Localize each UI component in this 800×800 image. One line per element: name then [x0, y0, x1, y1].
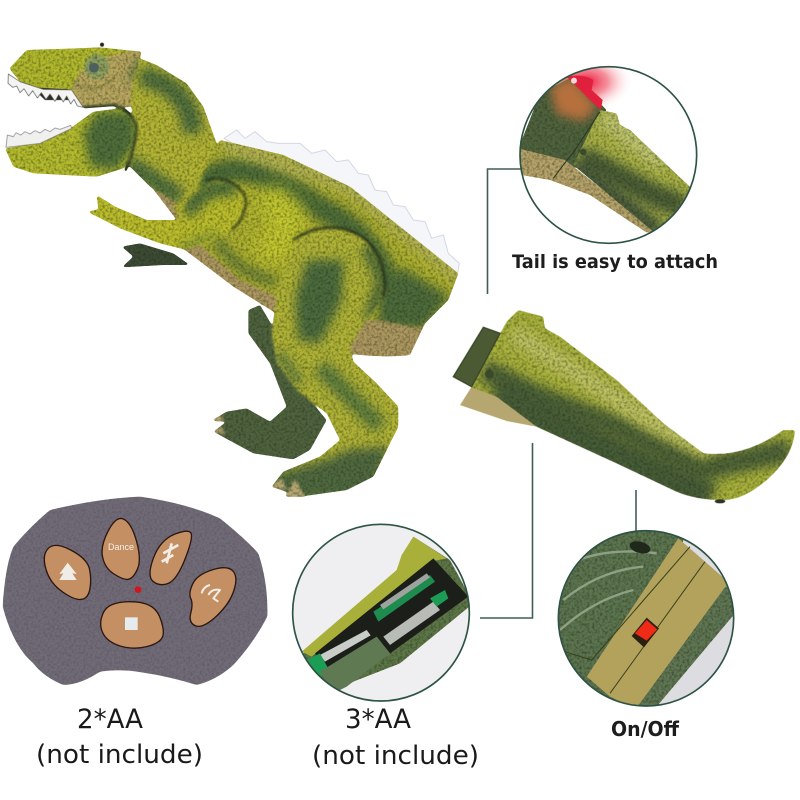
batteries — [373, 575, 435, 622]
label: toy not included: (not include) — [312, 741, 479, 771]
lower teeth — [6, 125, 72, 147]
tail screw — [485, 370, 494, 378]
seams — [565, 547, 705, 693]
bay cover — [320, 637, 390, 693]
torso — [172, 140, 458, 330]
near arm — [90, 178, 244, 252]
label: on/off: On/Off — [611, 717, 680, 741]
button: stop — [101, 602, 163, 648]
button: dance: Dance — [108, 542, 134, 552]
tan band — [587, 538, 730, 710]
green skin — [559, 532, 684, 701]
remote control — [3, 497, 267, 685]
caption: tail is easy to attach: Tail is easy to attach — [512, 251, 718, 273]
screw hole — [630, 541, 650, 554]
eye socket — [84, 54, 109, 79]
tail body — [467, 307, 800, 507]
detail circle: tail attachment — [517, 52, 697, 243]
tail underside wedge — [460, 387, 537, 427]
attached tail section — [574, 110, 690, 230]
button: roar — [190, 568, 236, 626]
button: walk — [150, 531, 192, 585]
detail circle: battery compartment — [293, 524, 473, 701]
connector line: tail attach — [488, 169, 521, 294]
connector line: battery compartment — [480, 443, 532, 618]
upper head — [7, 45, 147, 110]
button: dance — [102, 518, 139, 579]
lower jaw — [3, 107, 140, 178]
body section — [517, 77, 607, 170]
battery box — [453, 327, 500, 387]
yellow strip — [302, 537, 447, 657]
connector line: on/off switch — [635, 490, 637, 531]
tail wheel — [715, 499, 725, 503]
button: tree — [44, 545, 91, 600]
red switch — [635, 620, 657, 641]
toy body — [304, 538, 468, 683]
label: remote batteries: 2*AA — [77, 704, 144, 735]
near leg — [267, 223, 403, 500]
arm seam — [207, 178, 246, 230]
label: toy batteries: 3*AA — [345, 704, 412, 735]
eye and brow dot — [89, 43, 104, 73]
far leg — [212, 305, 327, 459]
upper teeth — [8, 74, 83, 107]
red glow — [556, 68, 626, 105]
battery bay — [315, 558, 468, 670]
indicator LED — [135, 586, 141, 593]
belly section — [518, 148, 657, 233]
neck — [126, 56, 219, 204]
belly — [150, 185, 425, 356]
dorsal spikes — [224, 130, 459, 275]
dinosaur toy — [3, 43, 467, 500]
detached tail — [453, 307, 800, 507]
far arm — [122, 243, 190, 267]
label: remote not included: (not include) — [36, 740, 203, 770]
remote body — [3, 497, 267, 685]
claws — [212, 415, 305, 497]
dinosaur body parts — [3, 45, 467, 500]
mouth and neck seam — [83, 105, 137, 172]
lower green band — [638, 586, 733, 706]
detail circle: on/off switch — [553, 523, 735, 713]
near leg joint line — [293, 228, 385, 297]
switch slot — [632, 618, 659, 647]
